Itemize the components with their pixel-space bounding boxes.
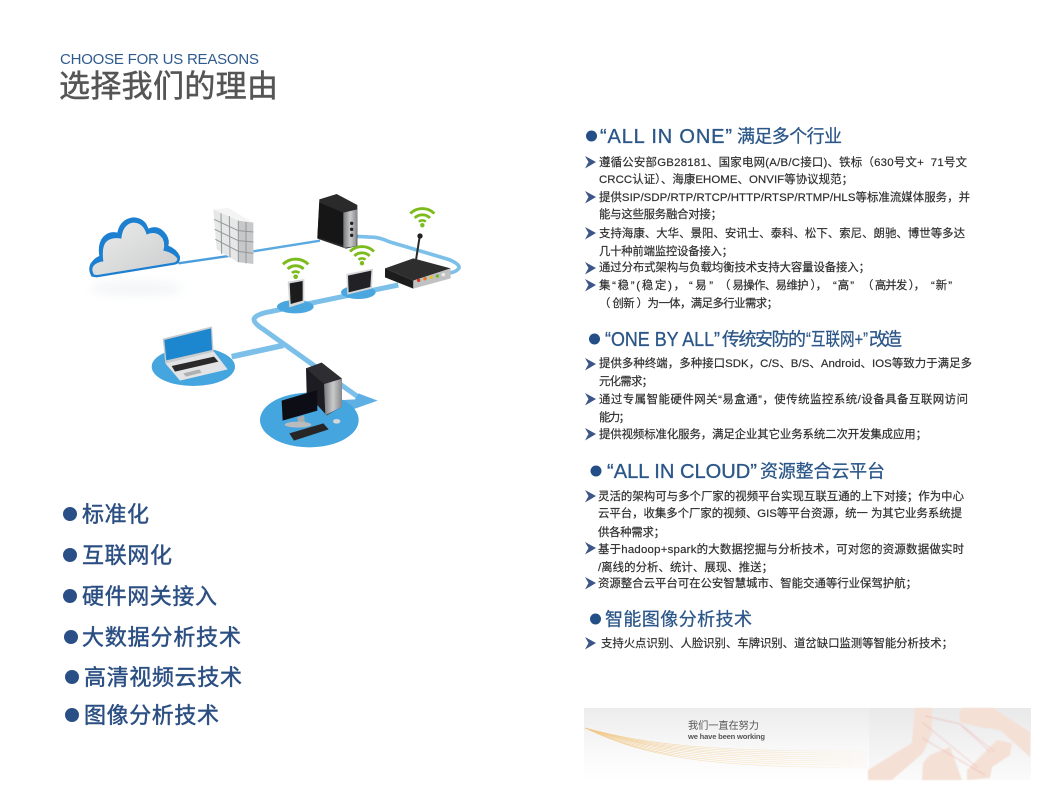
bullet list: all in one: 提供SIP/SDP/RTP/RTCP/HTTP/RTSP/RTMP/HLS等标准流媒体服务，并 — [599, 190, 970, 204]
bullet list: all in one: CRCC认证）、海康EHOME、ONVIF等协议规范； — [599, 172, 853, 186]
item: 硬件网关接入: 硬件网关接入 — [82, 584, 217, 609]
title block — [59, 51, 278, 104]
heading: one by all: 传统安防的 — [722, 330, 806, 350]
bullet list: image analysis: 支持火点识别、人脸识别、车牌识别、道岔缺口监测等智能分析技术； — [601, 636, 953, 650]
network diagram illustration — [89, 194, 459, 447]
bullet list: one by all: 提供多种终端，多种接口SDK，C/S、B/S、Android、IOS等致力于满足多 — [599, 356, 972, 370]
tower server — [317, 194, 357, 249]
banner chinese text: 我们一直在努力 — [688, 719, 759, 732]
heading: one by all: “互联网+” — [806, 330, 868, 350]
heading: all in cloud: “ALL IN CLOUD” — [607, 461, 757, 483]
panel: one by all — [585, 329, 972, 441]
router — [385, 233, 451, 289]
item: 互联网化: 互联网化 — [82, 543, 172, 568]
bullet list: one by all: 能力； — [599, 410, 630, 424]
banner english text: we have been working — [687, 732, 765, 741]
bullet list: all in one: （ 创新 ）为一体，满足多行业需求； — [599, 296, 778, 310]
hands photo illustration — [868, 708, 1030, 780]
feature list — [63, 502, 242, 728]
heading: all in one — [586, 126, 842, 148]
chinese title: 选择我们的理由 — [59, 69, 278, 104]
tablet device 2 — [346, 269, 373, 295]
heading: image analysis: 智能图像分析技术 — [605, 610, 752, 630]
bullet list: all in cloud: 基于hadoop+spark的大数据挖掘与分析技术，可对您的资源数据做实时 — [598, 542, 964, 556]
bullet list: all in cloud: 云平台，收集多个厂家的视频、GIS等平台资源，统一 为其它业务系统提 — [598, 506, 963, 520]
firewall — [213, 208, 253, 264]
bullet list: one by all: 通过专属智能硬件网关“易盒通”，使传统监控系统/设备具备互联网访问 — [599, 392, 968, 406]
bullet list: one by all: 提供视频标准化服务，满足企业其它业务系统二次开发集成应用； — [599, 427, 927, 441]
cloud — [89, 217, 180, 277]
bullet list: all in one: 通过分布式架构与负载均衡技术支持大容量设备接入； — [599, 260, 870, 274]
bullet list: all in one: “易” — [689, 279, 713, 292]
bullet list: all in one: 遵循公安部GB28181、国家电网(A/B/C接口)、铁标（630号文+ 71号文 — [599, 155, 968, 169]
bullet list: all in one: 几十种前端监控设备接入； — [599, 244, 733, 258]
triangular line end — [343, 393, 378, 412]
orange wave lines — [585, 728, 867, 767]
heading: one by all — [589, 329, 902, 351]
item: 图像分析技术: 图像分析技术 — [84, 703, 219, 728]
banner: we have been working — [584, 708, 1031, 780]
blue connection lines — [178, 236, 459, 398]
bullet list: all in cloud: 资源整合云平台可在公安智慧城市、智能交通等行业保驾护航； — [598, 576, 917, 590]
tablet device — [288, 279, 304, 307]
english subtitle: CHOOSE FOR US REASONS — [60, 51, 259, 68]
bullet list: all in one: （ 高并发 ）， — [862, 278, 925, 292]
bullet list: all in one — [585, 155, 970, 310]
panel: image analysis — [585, 610, 953, 650]
bullet list: all in cloud — [585, 489, 964, 590]
item: 高清视频云技术: 高清视频云技术 — [84, 665, 242, 690]
bullet list: all in cloud: 灵活的架构可与多个厂家的视频平台实现互联互通的上下对接；作为中心 — [598, 489, 964, 503]
heading: all in cloud — [590, 461, 885, 483]
bullet list: all in one: “高” — [833, 278, 854, 292]
bullet list: all in one: 能与这些服务融合对接； — [599, 207, 722, 221]
panel: all in cloud — [585, 461, 964, 590]
bullet list: all in one: “新” — [931, 278, 952, 292]
bullet list: one by all — [585, 356, 972, 441]
laptop station — [152, 326, 235, 386]
cloud shadow — [90, 281, 183, 296]
panel: all in one — [585, 126, 970, 310]
bullet list: all in cloud: 供各种需求； — [598, 525, 665, 539]
item: 大数据分析技术: 大数据分析技术 — [82, 625, 241, 650]
tablet platform — [277, 300, 314, 313]
bullet list: all in one: 集“稳”(稳定)， — [599, 278, 685, 292]
heading: one by all: 改造 — [869, 330, 902, 350]
heading: all in cloud: 资源整合云平台 — [760, 462, 885, 482]
desktop station — [260, 363, 359, 447]
bullet list: one by all: 元化需求； — [599, 374, 653, 388]
tablet platform 2 — [341, 286, 376, 299]
bullet list: all in one: 支持海康、大华、景阳、安讯士、泰科、松下、索尼、朗驰、博世等多达 — [599, 226, 965, 240]
heading: all in one: 满足多个行业 — [737, 126, 842, 146]
banner photo background — [869, 708, 1031, 780]
bullet list: all in cloud: /离线的分析、统计、展现、推送； — [598, 560, 773, 574]
bullet list: all in one: （ 易操作、易维护 ）， — [719, 278, 827, 292]
item: 标准化: 标准化 — [82, 502, 149, 527]
wifi icons — [283, 209, 434, 279]
heading: one by all: “ONE BY ALL” — [605, 329, 720, 351]
heading: all in one: “ALL IN ONE” — [600, 126, 732, 148]
